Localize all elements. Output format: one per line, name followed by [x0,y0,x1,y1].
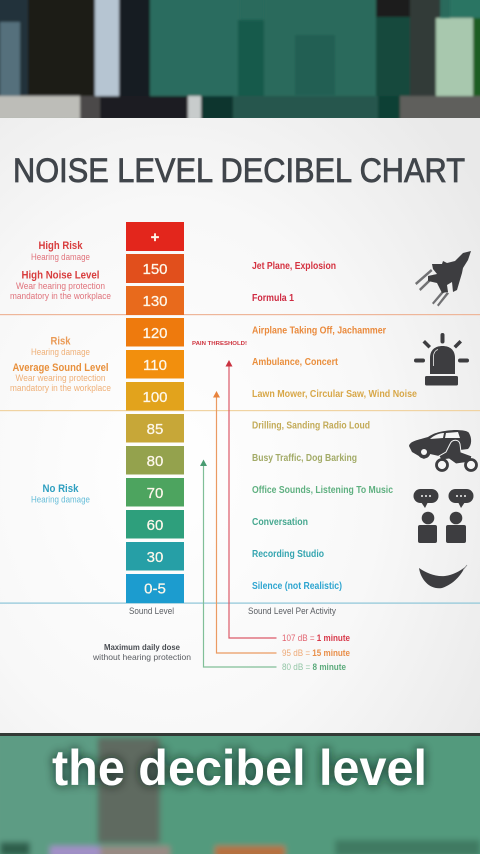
risk text: no risk: Hearing damage [31,494,90,504]
risk text: risk: Average Sound Level [12,362,108,374]
activity labels: Busy Traffic, Dog Barking [252,453,357,464]
scale row: 0-5 [126,574,184,603]
activity labels: Airplane Taking Off, Jachammer [252,326,386,336]
dose label: 95 dB: 95 dB = 15 minute [282,648,350,658]
activity labels: Conversation [252,517,308,528]
icon: fighter jet [415,251,471,306]
scale row: 120 [126,318,184,346]
column caption: sound level: Sound Level [129,606,174,616]
scale row: 80 [126,446,184,474]
activity labels: Office Sounds, Listening To Music [252,485,393,496]
scale row: 150: 150 [142,261,168,278]
activity labels [252,261,417,592]
arrow: 95 dB [213,391,276,653]
icon: car and motorcycle [409,430,476,470]
scale row: 70: 70 [147,485,163,502]
risk text: high risk: High Noise Level [22,270,100,282]
scale row: +: + [151,229,160,246]
panel: chart sheet [0,118,480,733]
scale row: 70 [126,478,184,506]
icon: siren [414,333,469,386]
dose label: 80 dB: 80 dB = 8 minute [282,662,346,672]
scale row: 110: 110 [143,357,167,374]
maximum daily dose note: without hearing protection [92,652,191,662]
scale row: 110 [126,350,184,378]
scale row: 85 [126,414,184,442]
risk text: risk: mandatory in the workplace [10,383,111,393]
activity labels: Lawn Mower, Circular Saw, Wind Noise [252,389,417,400]
scale row: 80: 80 [147,453,163,470]
scale row: 30 [126,542,184,570]
scale row: 60 [126,510,184,538]
risk text: high risk: Hearing damage [31,252,90,262]
caption: the decibel level [52,740,427,796]
scale row: 100 [126,382,184,410]
activity labels: Recording Studio [252,549,324,560]
icon: feather [419,565,467,588]
risk text: risk: Wear wearing protection [16,373,106,383]
risk text: risk: Risk [50,336,71,348]
risk text: risk [10,336,111,393]
zone divider lines [0,314,480,604]
activity labels: Drilling, Sanding Radio Loud [252,420,370,432]
scale row: 85: 85 [147,421,163,438]
scale row: 130 [126,286,184,315]
risk text: high risk [10,240,111,301]
icon: two people talking [414,489,474,543]
risk text: no risk [31,483,90,504]
scale row: 120: 120 [142,325,168,342]
maximum daily dose note [92,642,191,662]
background: blurred video frame top [0,0,480,120]
column caption: sound level per activity: Sound Level Per Activity [248,606,337,616]
caption: the decibel level [52,740,427,796]
scale row: 150 [126,254,184,283]
risk text: risk: Hearing damage [31,347,90,357]
background: blurred video frame bottom [0,733,480,854]
arrow: 107 dB [226,360,276,638]
risk text: high risk: Wear hearing protection [16,281,105,291]
scale row: 0-5: 0-5 [144,580,166,598]
scale row: 100: 100 [142,389,168,406]
risk text: no risk: No Risk [42,483,79,495]
activity labels: Silence (not Realistic) [252,581,342,592]
arrow: 80 dB [200,460,276,667]
scale row: 130: 130 [142,293,168,310]
scale row: 30: 30 [147,549,163,566]
scale row: 60: 60 [147,517,163,534]
maximum daily dose note: Maximum daily dose [104,642,180,652]
decibel scale column [126,222,184,603]
activity labels: Formula 1 [252,293,294,304]
scale row: + [126,222,184,251]
pain threshold label: PAIN THRESHOLD! [192,341,247,347]
risk text: high risk: mandatory in the workplace [10,291,111,301]
dose label: 107 dB: 107 dB = 1 minute [282,633,350,643]
activity labels: Jet Plane, Explosion [252,261,336,272]
risk text: high risk: High Risk [38,240,83,252]
activity labels: Ambulance, Concert [252,357,338,368]
